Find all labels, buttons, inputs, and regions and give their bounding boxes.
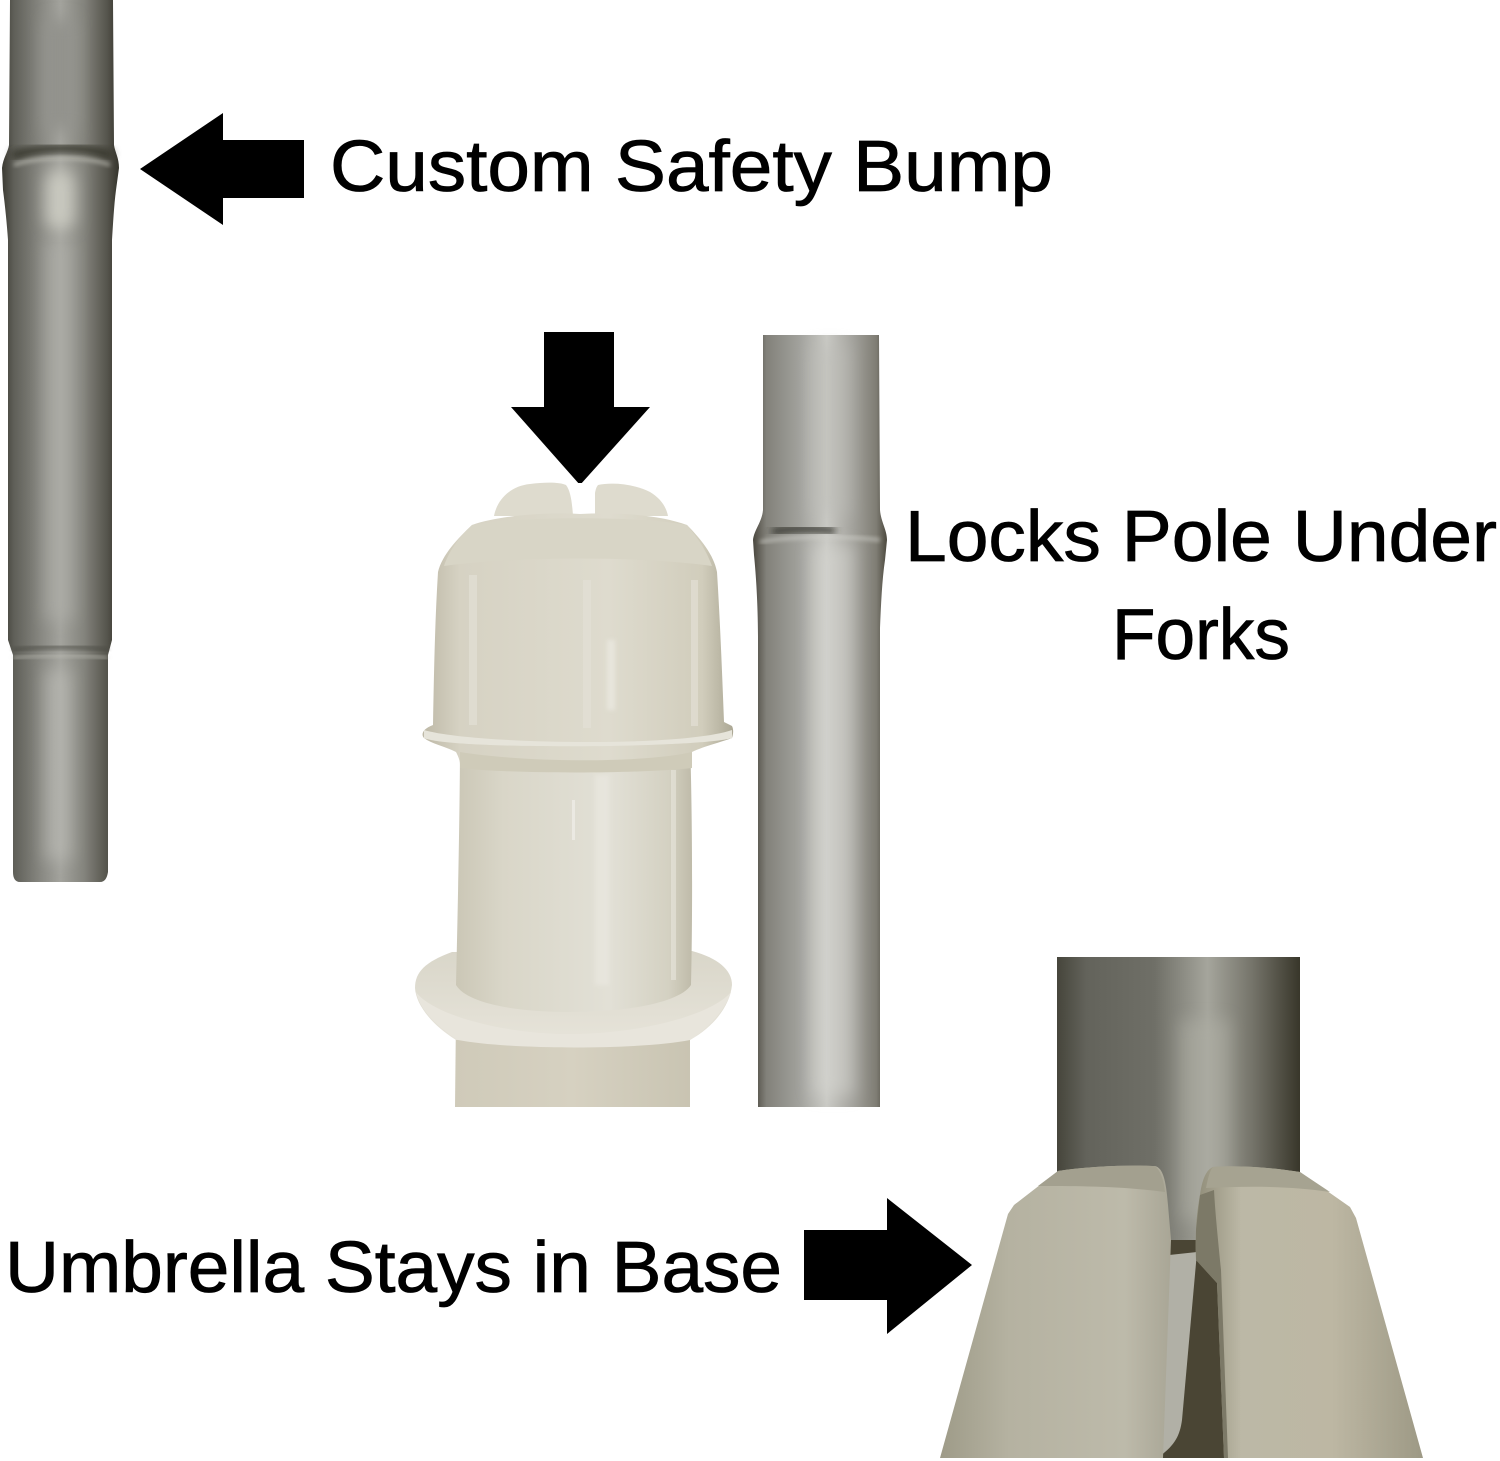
metal pole with bump xyxy=(753,335,887,1107)
pole with custom safety bump xyxy=(2,0,119,882)
label: custom safety bump: Custom Safety Bump xyxy=(330,127,1053,207)
arrow: pointing down to fork slot xyxy=(511,332,650,485)
arrow: pointing right to forks xyxy=(804,1198,972,1334)
fork slot xyxy=(573,483,595,515)
lower flange xyxy=(415,951,732,1040)
middle cylinder xyxy=(456,740,692,1012)
plastic locking cap xyxy=(415,483,733,1107)
cap ribs xyxy=(469,575,477,725)
upper cap xyxy=(423,513,733,769)
lugs xyxy=(494,483,573,516)
right fork xyxy=(1196,1166,1423,1458)
slot xyxy=(1155,1240,1232,1458)
label: locks pole under forks xyxy=(905,497,1497,675)
label: umbrella stays in base: Umbrella Stays in Base xyxy=(5,1228,782,1308)
pole in base xyxy=(1057,957,1300,1257)
label: locks pole under forks: Locks Pole Under xyxy=(905,497,1497,577)
arrow: custom safety bump xyxy=(140,113,304,225)
label: locks pole under forks: Forks xyxy=(1112,595,1290,675)
base forks with pole xyxy=(940,957,1423,1458)
left fork xyxy=(940,1166,1171,1458)
lower body xyxy=(455,1015,690,1107)
